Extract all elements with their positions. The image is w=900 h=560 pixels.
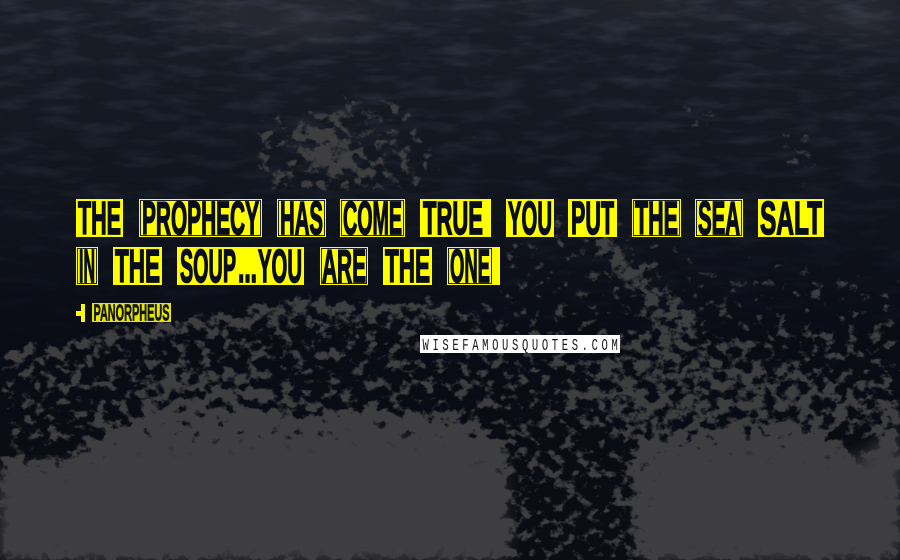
word: the xyxy=(383,240,432,292)
word: You xyxy=(506,192,554,244)
word: come xyxy=(340,192,405,244)
solid foam underlay xyxy=(0,430,900,560)
icon: quote mark xyxy=(76,304,85,322)
word: one!: ! xyxy=(493,254,501,287)
word: sea xyxy=(695,192,743,244)
word: put: PUT xyxy=(571,192,614,244)
word: the: THE xyxy=(385,240,430,292)
word: soup...You: SOUP xyxy=(180,240,236,292)
word: the: THE xyxy=(635,192,678,244)
quote text xyxy=(76,192,824,292)
word: the: THE xyxy=(115,240,160,292)
quote text: PROPHECY xyxy=(142,192,259,244)
word: one! xyxy=(447,240,501,292)
word: has xyxy=(277,192,326,244)
word: prophecy xyxy=(139,192,262,244)
quote text: ARE xyxy=(322,240,366,292)
word: salt: SALT xyxy=(760,192,822,244)
quote text: YOU xyxy=(258,240,302,292)
word: the xyxy=(113,240,162,292)
word: salt xyxy=(758,192,824,244)
word: in xyxy=(76,240,98,292)
word: soup...You: ... xyxy=(238,240,257,292)
quote text: IN xyxy=(79,240,95,292)
word: put xyxy=(568,192,617,244)
word: true!: TRUE xyxy=(423,192,483,244)
quote text: THE xyxy=(78,192,121,244)
quote text: HAS xyxy=(280,192,323,244)
word: are xyxy=(320,240,368,292)
watermark: wisefamousquotes.com: WISEFAMOUSQUOTES.COM xyxy=(422,337,618,356)
word: true! xyxy=(420,192,493,244)
word: true!: ! xyxy=(485,206,493,239)
attribution: Panorpheus xyxy=(92,300,171,326)
word: The xyxy=(76,192,123,244)
quote text: SEA xyxy=(698,192,740,244)
text: PANORPHEUS xyxy=(94,300,170,326)
word: one!: ONE xyxy=(450,240,490,292)
word: the xyxy=(632,192,681,244)
quote text: COME xyxy=(343,192,402,244)
quote text: YOU xyxy=(508,192,552,244)
